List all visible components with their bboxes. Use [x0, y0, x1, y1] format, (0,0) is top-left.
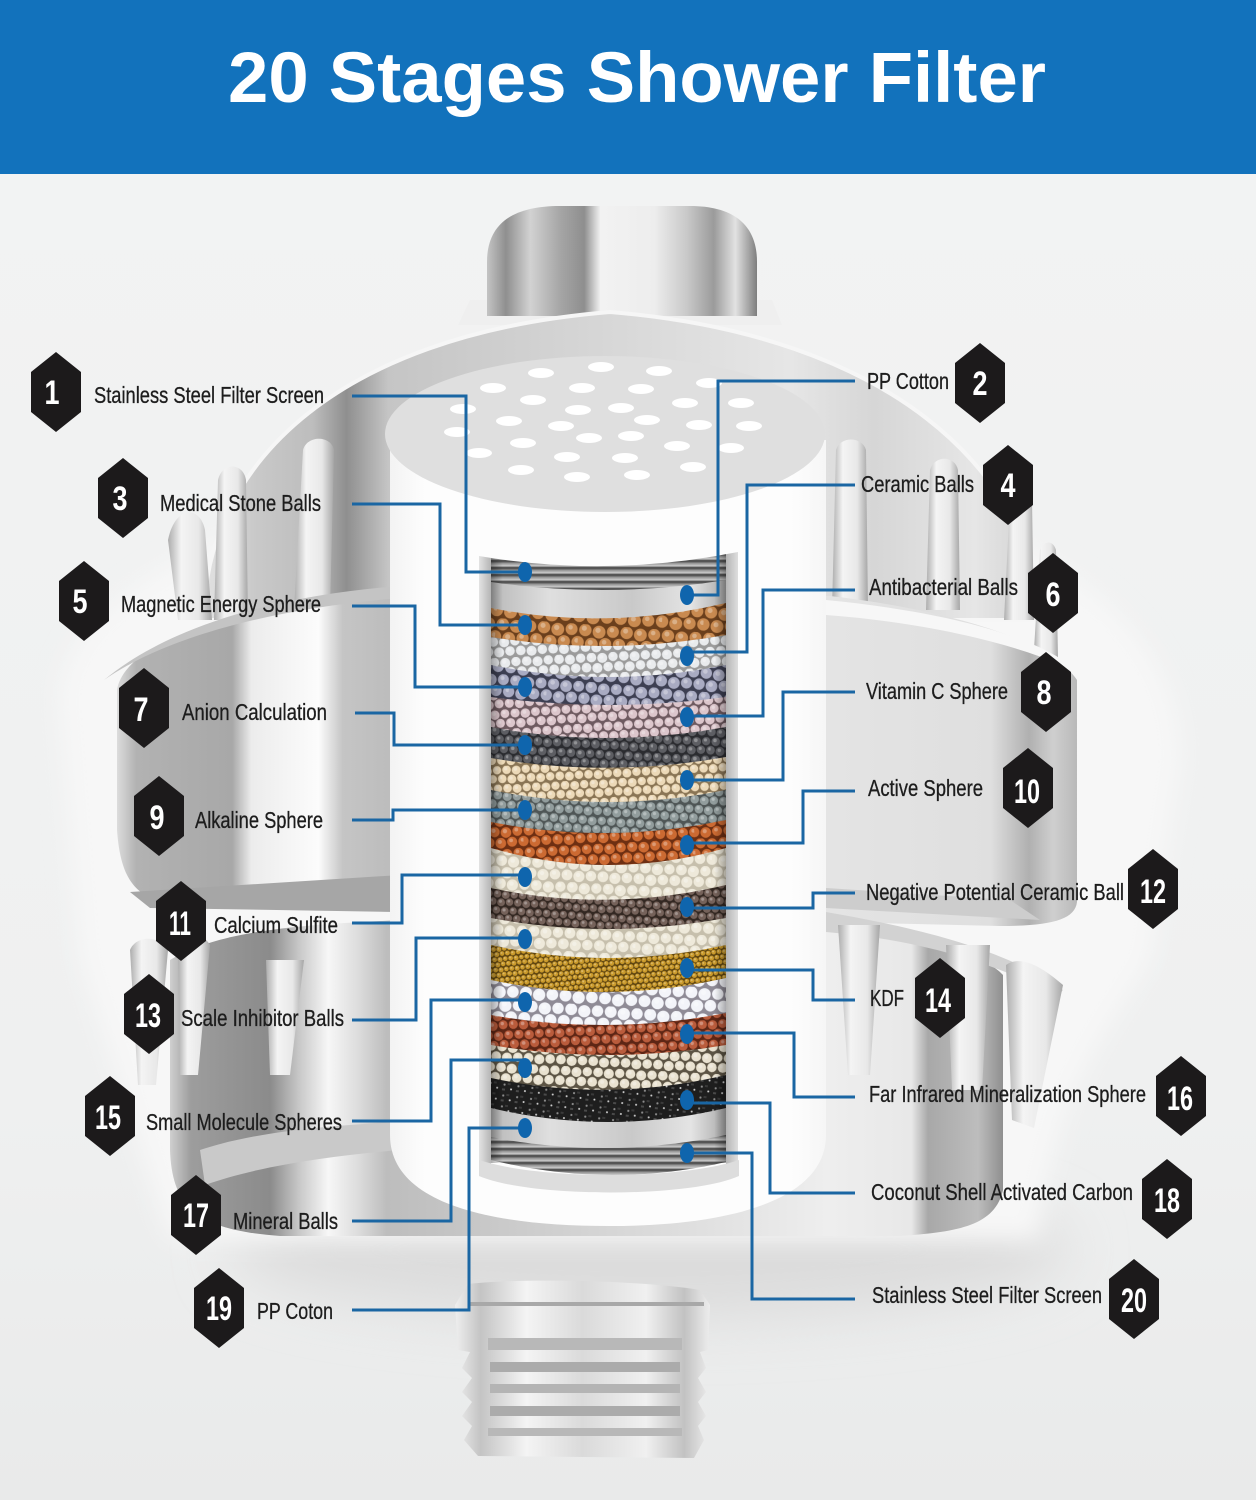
white cover above column: [479, 530, 738, 566]
cartridge body: [390, 440, 826, 1226]
callout 16: 16: [1167, 1080, 1193, 1118]
callout 6: 6: [1046, 576, 1060, 614]
callout 11: [156, 867, 532, 961]
callout 1: 1: [44, 374, 60, 412]
callout 7: 7: [134, 691, 148, 729]
callout 16: [680, 1024, 1206, 1136]
callout 9: [134, 776, 532, 856]
callout 15: [85, 992, 532, 1156]
lower fins: [130, 925, 1063, 1128]
perforated top disc: [385, 356, 825, 512]
callout 17: Mineral Balls: [233, 1208, 338, 1234]
callout 11: 11: [169, 905, 191, 943]
callout 12: Negative Potential Ceramic Ball: [866, 879, 1124, 905]
callout 16: Far Infrared Mineralization Sphere: [869, 1081, 1146, 1107]
callout 18: 18: [1154, 1182, 1180, 1220]
callout 15: Small Molecule Spheres: [146, 1109, 342, 1135]
callout 18: [680, 1090, 1192, 1239]
callout 3: Medical Stone Balls: [160, 490, 321, 516]
callout 20: Stainless Steel Filter Screen: [872, 1282, 1102, 1308]
callout 10: Active Sphere: [868, 775, 983, 801]
callout 4: Ceramic Balls: [861, 471, 974, 497]
callout 9: 9: [150, 799, 164, 837]
callout 11: Calcium Sulfite: [214, 912, 338, 938]
callout 6: [680, 553, 1078, 727]
callout 12: 12: [1140, 873, 1166, 911]
white filter cartridge: [385, 356, 826, 1226]
callout 2: PP Cotton: [867, 368, 949, 394]
callout 2: [680, 343, 1005, 605]
callout 7: [119, 668, 532, 755]
callout 2: 2: [972, 365, 988, 403]
title: 20 Stages Shower Filter: [228, 39, 1046, 118]
chrome top cap: [458, 206, 782, 325]
soft shadow behind filter: [230, 1180, 1070, 1320]
callout 10: 10: [1014, 773, 1040, 811]
callout 3: 3: [112, 480, 128, 518]
callout 4: 4: [1000, 467, 1016, 505]
callout 17: 17: [183, 1197, 209, 1235]
callout 19: 19: [206, 1290, 232, 1328]
callout 8: [680, 652, 1071, 790]
callout 3: [98, 458, 532, 635]
chrome shower filter body: [104, 206, 1088, 1458]
cutaway filter media column: [479, 530, 739, 1192]
callout 14: KDF: [870, 985, 904, 1011]
callout 20: [680, 1143, 1159, 1339]
callout 13: Scale Inhibitor Balls: [181, 1005, 344, 1031]
callout 18: Coconut Shell Activated Carbon: [871, 1179, 1133, 1205]
upper fins: [168, 439, 1058, 660]
callout 13: 13: [135, 997, 161, 1035]
threaded bottom connector: [455, 1281, 710, 1458]
callout 1: Stainless Steel Filter Screen: [94, 382, 324, 408]
callout 5: [59, 561, 532, 697]
chrome dome: [204, 312, 1042, 620]
callout 8: 8: [1036, 674, 1052, 712]
callout 5: Magnetic Energy Sphere: [121, 591, 321, 617]
callout 9: Alkaline Sphere: [195, 807, 323, 833]
callout 12: [680, 849, 1178, 929]
column frame: [479, 552, 739, 1192]
light halo around filter: [60, 480, 1180, 1240]
callout 15: 15: [95, 1099, 121, 1137]
callout 14: 14: [925, 982, 951, 1020]
header band: [0, 0, 1256, 174]
callout 8: Vitamin C Sphere: [866, 678, 1008, 704]
callout 7: Anion Calculation: [182, 699, 327, 725]
callout 6: Antibacterial Balls: [869, 574, 1018, 600]
callout 14: [680, 958, 965, 1038]
chrome middle ring: [104, 586, 1088, 926]
chrome lower section: [170, 912, 1063, 1236]
callout 19: PP Coton: [257, 1298, 333, 1324]
callout 4: [680, 445, 1033, 666]
callout 20: 20: [1121, 1282, 1147, 1320]
callout 5: 5: [72, 583, 88, 621]
callout 1: [31, 352, 532, 582]
callout 13: [124, 929, 532, 1054]
callout 17: [171, 1058, 532, 1255]
media layers: [491, 550, 726, 1175]
callout 19: [194, 1118, 532, 1348]
callout 10: [680, 748, 1053, 855]
